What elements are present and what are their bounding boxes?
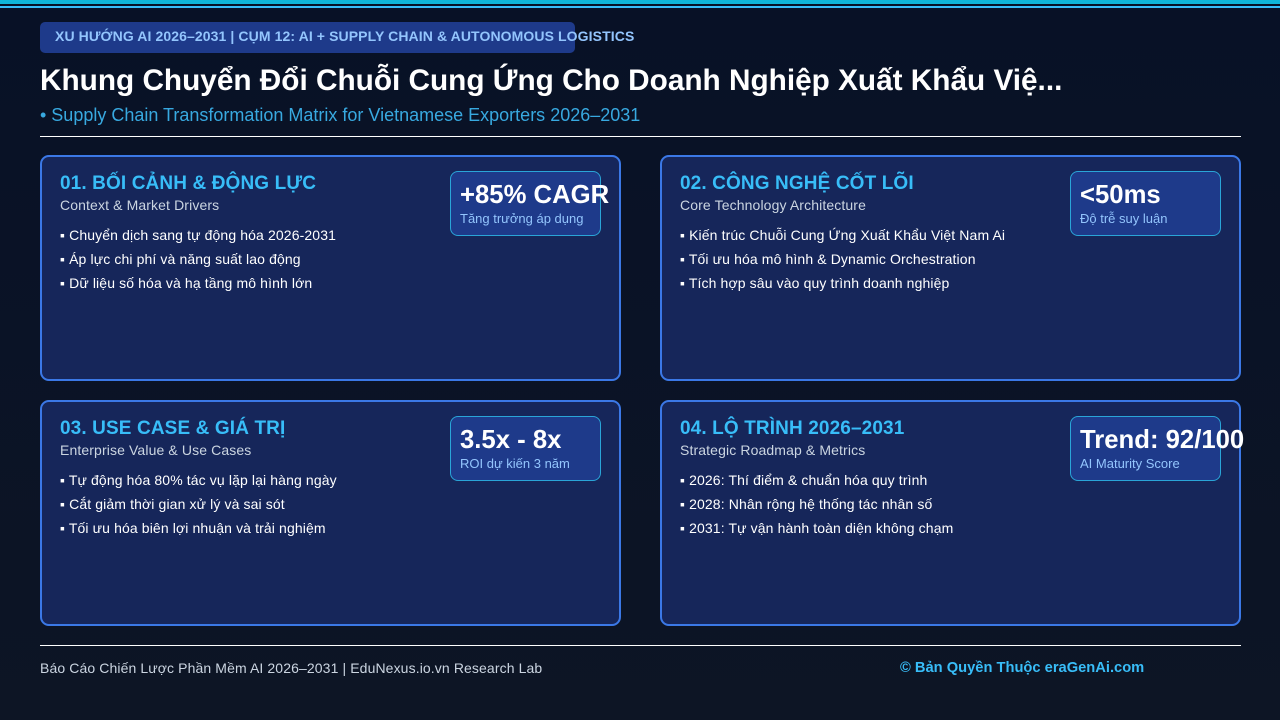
bullet list: ▪ 2031: Tự vận hành toàn diện không chạm xyxy=(680,520,953,536)
bullet list xyxy=(680,227,1005,291)
bullet list: ▪ 2028: Nhân rộng hệ thống tác nhân số xyxy=(680,496,932,512)
panel: roadmap xyxy=(660,400,1241,626)
metric callout xyxy=(450,416,601,481)
metric callout xyxy=(1070,171,1221,236)
header divider xyxy=(40,136,1241,137)
top accent bar xyxy=(0,0,1280,8)
bullet list: ▪ Áp lực chi phí và năng suất lao động xyxy=(60,251,301,267)
metric callout: ROI dự kiến 3 năm xyxy=(460,456,570,471)
category badge xyxy=(40,22,575,53)
metric callout: AI Maturity Score xyxy=(1080,456,1180,471)
bullet list xyxy=(60,227,336,291)
subtitle: • Supply Chain Transformation Matrix for Vietnamese Exporters 2026–2031 xyxy=(40,105,640,125)
panel heading: 03. USE CASE & GIÁ TRỊ xyxy=(60,418,285,439)
bullet list: ▪ Tích hợp sâu vào quy trình doanh nghiệp xyxy=(680,275,949,291)
footer copyright: © Bản Quyền Thuộc eraGenAi.com xyxy=(900,660,1144,676)
footer divider xyxy=(40,645,1241,646)
bullet list: ▪ Kiến trúc Chuỗi Cung Ứng Xuất Khẩu Việt Nam Ai xyxy=(680,227,1005,243)
metric callout: Tăng trưởng áp dụng xyxy=(460,211,583,226)
metric callout: Trend: 92/100 xyxy=(1080,426,1244,454)
title: Khung Chuyển Đổi Chuỗi Cung Ứng Cho Doanh Nghiệp Xuất Khẩu Việ... xyxy=(40,64,1062,97)
panel heading: 01. BỐI CẢNH & ĐỘNG LỰC xyxy=(60,173,316,194)
category badge: XU HƯỚNG AI 2026–2031 | CỤM 12: AI + SUPPLY CHAIN & AUTONOMOUS LOGISTICS xyxy=(55,28,634,44)
bullet list: ▪ Tự động hóa 80% tác vụ lặp lại hàng ngày xyxy=(60,472,337,488)
bullet list: ▪ Chuyển dịch sang tự động hóa 2026-2031 xyxy=(60,227,336,243)
metric callout: Độ trễ suy luận xyxy=(1080,211,1167,226)
panel subheading: Core Technology Architecture xyxy=(680,197,866,213)
metric callout xyxy=(450,171,601,236)
bullet list: ▪ Cắt giảm thời gian xử lý và sai sót xyxy=(60,496,285,512)
panel subheading: Strategic Roadmap & Metrics xyxy=(680,442,865,458)
panel subheading: Context & Market Drivers xyxy=(60,197,219,213)
bullet list: ▪ Tối ưu hóa biên lợi nhuận và trải nghiệm xyxy=(60,520,326,536)
footer source text: Báo Cáo Chiến Lược Phần Mềm AI 2026–2031 | EduNexus.io.vn Research Lab xyxy=(40,660,542,676)
bullet list xyxy=(60,472,337,536)
panel: core technology xyxy=(660,155,1241,381)
metric callout: <50ms xyxy=(1080,181,1161,209)
panel heading: 02. CÔNG NGHỆ CỐT LÕI xyxy=(680,173,914,194)
panel heading: 04. LỘ TRÌNH 2026–2031 xyxy=(680,418,904,439)
metric callout: +85% CAGR xyxy=(460,181,609,209)
panel subheading: Enterprise Value & Use Cases xyxy=(60,442,251,458)
panel: use cases and value xyxy=(40,400,621,626)
metric callout: 3.5x - 8x xyxy=(460,426,561,454)
bullet list: ▪ Dữ liệu số hóa và hạ tầng mô hình lớn xyxy=(60,275,312,291)
bullet list: ▪ Tối ưu hóa mô hình & Dynamic Orchestration xyxy=(680,251,976,267)
panel: context and market drivers xyxy=(40,155,621,381)
bullet list xyxy=(680,472,953,536)
bullet list: ▪ 2026: Thí điểm & chuẩn hóa quy trình xyxy=(680,472,927,488)
metric callout xyxy=(1070,416,1221,481)
